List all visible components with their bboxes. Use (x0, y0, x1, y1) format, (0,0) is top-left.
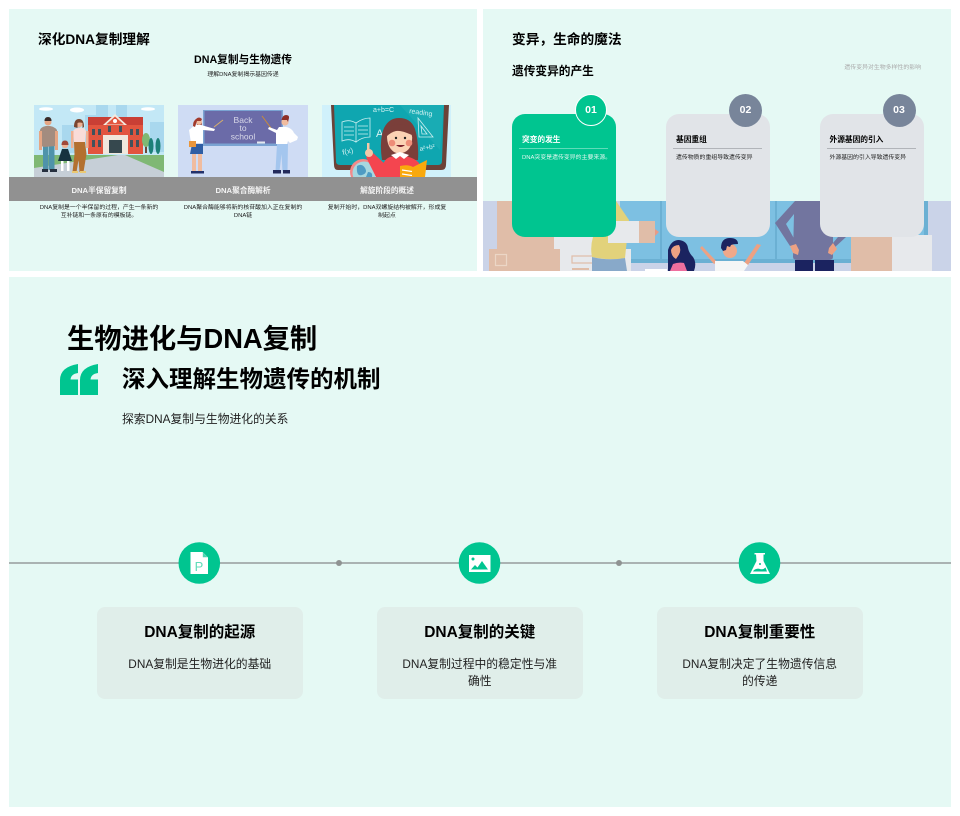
card 03: foreign genes (820, 114, 924, 237)
illustration: teachers at blackboard (178, 105, 308, 177)
card: key of DNA replication (377, 607, 582, 699)
text: unwinding description (328, 204, 446, 219)
illustration: teachers at blackboard: school (231, 132, 255, 142)
card text: 外源基因的引入导致遗传变异 (830, 154, 906, 160)
card text (682, 656, 837, 688)
caption: unwinding overview: 解旋阶段的概述 (360, 186, 414, 195)
card divider (826, 148, 916, 149)
icon: P document: P (195, 559, 203, 574)
man (39, 117, 58, 172)
card text: 的传递 (742, 674, 777, 688)
man teacher (262, 115, 298, 174)
illustration: teachers at blackboard: Back (234, 115, 253, 125)
woman (71, 119, 88, 173)
text: semiconservative description: 互补链和一条原有的模板链。 (61, 213, 137, 219)
text: unwinding description: 制起点 (378, 213, 396, 219)
text: intro sentence: 探索DNA复制与生物进化的关系 (122, 412, 288, 426)
heading: slide title: 生物进化与DNA复制 (67, 322, 317, 354)
card 02: gene recombination (666, 114, 770, 237)
text: unwinding description: 复制开始时，DNA双螺旋结构被解开，形成复 (328, 204, 446, 210)
illustration: people with moving boxes (483, 201, 951, 271)
book (400, 160, 427, 177)
number badge 02 (729, 94, 762, 127)
board writing: a²+b² (419, 143, 436, 153)
heading: section subtitle: DNA复制与生物遗传 (194, 54, 292, 66)
icon: picture (469, 555, 490, 572)
card: origin of DNA replication (97, 607, 302, 699)
standing person (775, 201, 846, 271)
board writing: reading (409, 108, 433, 118)
number badge 03 (882, 94, 916, 127)
card title: DNA复制重要性 (704, 624, 815, 640)
card text: DNA复制是生物进化的基础 (128, 656, 271, 670)
card: importance of DNA replication (657, 607, 862, 699)
band: grey caption strip (9, 177, 477, 201)
panel: evolution and DNA replication (9, 277, 951, 807)
card title: DNA复制的关键 (424, 624, 535, 640)
icon: flask (750, 553, 770, 574)
card text: DNA突变是遗传变异的主要来源。 (522, 154, 611, 160)
text: semiconservative description (40, 204, 158, 219)
board doodles (342, 118, 433, 142)
heading: slide title: 深化DNA复制理解 (38, 32, 150, 47)
panel: variation, the magic of life (483, 9, 951, 271)
person carrying box (591, 201, 659, 271)
heading: slide title: 变异，生命的魔法 (512, 32, 622, 47)
woman seated (645, 240, 695, 271)
illustration: girl and chalkboard (322, 105, 451, 177)
card text (402, 656, 557, 688)
card title: 基因重组 (676, 134, 707, 144)
caption: semiconservative replication: DNA半保留复制 (71, 186, 127, 195)
heading: deeper understanding: 深入理解生物遗传的机制 (122, 366, 380, 392)
caption: polymerase analysis: DNA聚合酶解析 (215, 186, 271, 195)
number badge 03: 03 (893, 104, 905, 116)
card title: DNA复制的起源 (144, 624, 255, 640)
woman teacher (189, 118, 223, 174)
boy with raised arms (700, 238, 761, 271)
board writing: a+b=C (373, 107, 394, 114)
text: polymerase description: DNA聚合酶能够将新的核苷酸加入正在复制的 (184, 204, 302, 210)
card text: 遗传物质的重组导致遗传变异 (676, 154, 753, 160)
timeline: line, dots and icons (9, 542, 951, 584)
number badge 01: 01 (585, 104, 597, 116)
text: polymerase description (184, 204, 302, 219)
globe (350, 159, 376, 185)
panel: deepen DNA replication understanding (9, 9, 477, 271)
card divider (519, 148, 608, 149)
card text: DNA复制过程中的稳定性与准 (402, 656, 557, 670)
number badge 02: 02 (740, 104, 751, 116)
board writing: f(x) (341, 145, 354, 157)
illustration: family at school (34, 105, 164, 177)
board writing: A (376, 128, 384, 140)
text: section note: 遗传变异对生物多样性的影响 (844, 64, 921, 70)
card title: 突变的发生 (522, 134, 560, 144)
card title: 外源基因的引入 (830, 134, 883, 144)
text: semiconservative description: DNA复制是一个半保留的过程，产生一条新的 (40, 204, 158, 210)
heading: section subtitle: 遗传变异的产生 (512, 64, 594, 78)
icon: P document (190, 552, 208, 574)
girl (58, 140, 72, 171)
text: polymerase description: DNA链 (234, 213, 252, 219)
card 01: mutation (512, 114, 616, 237)
card text: 确性 (468, 674, 492, 688)
illustration: teachers at blackboard: to (239, 123, 247, 133)
number badge 01 (575, 94, 607, 126)
girl (365, 118, 420, 177)
card divider (673, 148, 762, 149)
card text: DNA复制决定了生物遗传信息 (682, 656, 837, 670)
icon: quotation mark (60, 364, 98, 395)
board writing (341, 107, 436, 157)
text: section description: 理解DNA复制揭示基因传递 (207, 72, 279, 78)
